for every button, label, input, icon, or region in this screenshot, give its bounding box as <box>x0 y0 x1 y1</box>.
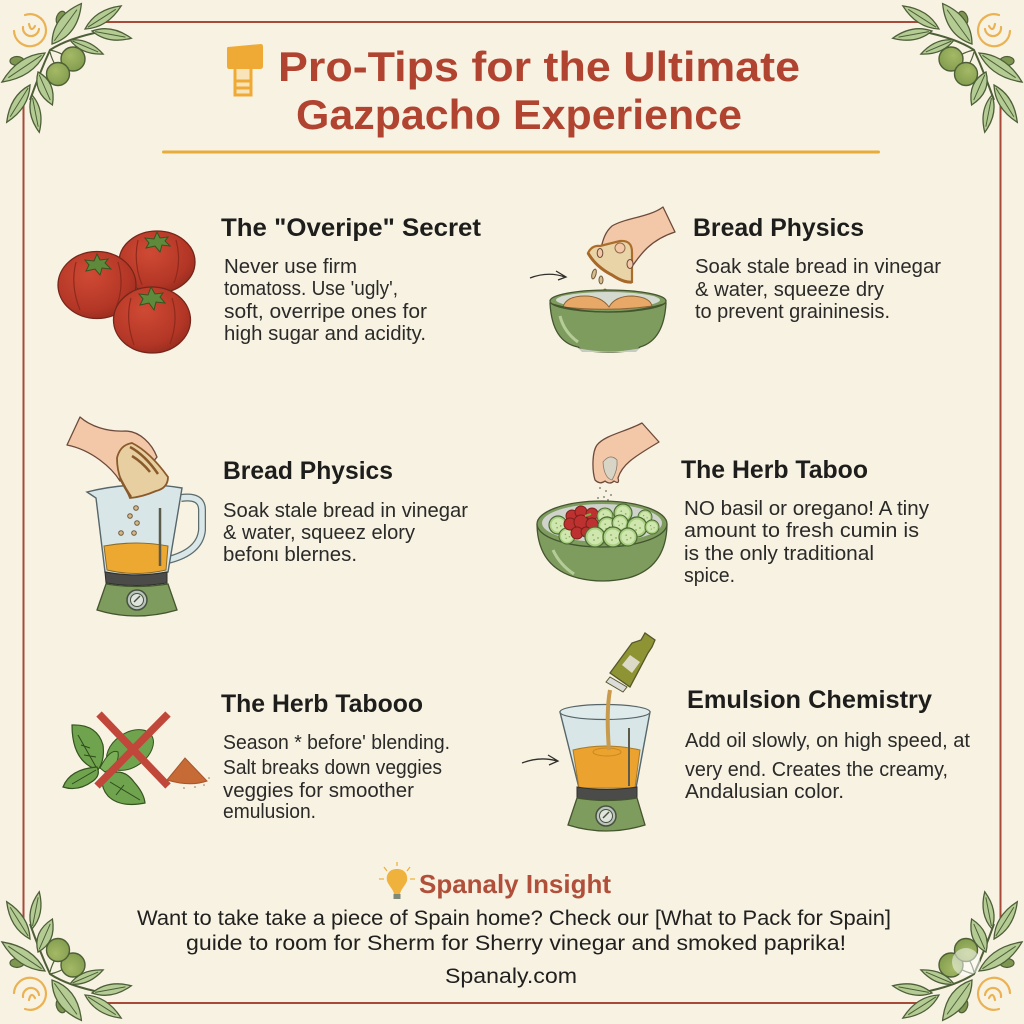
panel: bread physics top <box>530 207 941 352</box>
icon: oil bottle pouring into blender <box>522 633 655 831</box>
title <box>278 43 800 138</box>
body text: very end. Creates the creamy, <box>685 759 948 781</box>
body text: emulusion. <box>223 801 316 823</box>
icon: bread into blender <box>67 417 202 616</box>
body text: Season * before' blending. <box>223 732 450 754</box>
body text: & water, squeez elory <box>223 522 415 544</box>
panel: overripe secret <box>58 214 482 353</box>
icon: tomatoes <box>58 231 195 353</box>
heading: Emulsion Chemistry <box>687 686 932 714</box>
body text: veggies for smoother <box>223 780 414 802</box>
panel: bread physics middle <box>67 417 468 616</box>
body text: is the only traditional <box>684 543 874 565</box>
corner ornament: bottom left <box>0 891 132 1024</box>
body text <box>695 256 941 323</box>
panel: herb taboo left <box>63 690 450 823</box>
body text: to prevent graininesis. <box>695 301 890 323</box>
website: Spanaly.com <box>445 964 577 988</box>
footer text: Want to take take a piece of Spain home? Check our [What to Pack for Spain] <box>137 906 891 930</box>
heading: The "Overipe" Secret <box>221 214 482 242</box>
body text: Soak stale bread in vinegar <box>223 500 468 522</box>
icon: light bulb <box>379 862 415 899</box>
body text: Salt breaks down veggies <box>223 757 442 779</box>
body text: soft, overripe ones for <box>224 301 427 323</box>
body text <box>223 500 468 566</box>
body text <box>223 732 450 823</box>
body text: spice. <box>684 565 735 587</box>
body text <box>685 730 970 803</box>
icon: hand squeezing bread over bowl <box>530 207 675 352</box>
title: Pro-Tips for the Ultimate <box>278 43 800 90</box>
body text: tomatoss. Use 'ugly', <box>224 278 398 300</box>
body text: Never use firm <box>224 256 357 278</box>
heading: The Herb Tabooo <box>221 690 423 718</box>
body text: amount to fresh cumin is <box>684 520 919 542</box>
body text: & water, squeeze dry <box>695 279 884 301</box>
heading: Bread Physics <box>693 214 864 242</box>
body text: Add oil slowly, on high speed, at <box>685 730 970 752</box>
heading: Bread Physics <box>223 457 393 485</box>
corner ornament: top left <box>0 0 132 133</box>
title icon <box>227 44 263 95</box>
body text: befonι blernes. <box>223 544 357 566</box>
body text: NO basil or oregano! A tiny <box>684 498 929 520</box>
footer text: guide to room for Sherm for Sherry vinegar and smoked paprika! <box>186 931 846 955</box>
title underline <box>162 150 880 154</box>
heading: The Herb Taboo <box>681 456 868 484</box>
icon: crossed out herbs and spice <box>63 714 210 804</box>
corner ornament: top right <box>892 0 1024 133</box>
panel: emulsion chemistry <box>522 633 970 831</box>
body text <box>224 256 427 345</box>
panel: herb taboo right <box>537 423 929 587</box>
icon: salad bowl with sprinkling hand <box>537 423 667 581</box>
body text: high sugar and acidity. <box>224 323 426 345</box>
footer heading: Spanaly Insight <box>419 869 611 899</box>
body text: Soak stale bread in vinegar <box>695 256 941 278</box>
footer text <box>137 906 891 955</box>
title: Gazpacho Experience <box>296 91 742 138</box>
corner ornament: bottom right <box>892 891 1024 1024</box>
body text <box>684 498 929 587</box>
body text: Andalusian color. <box>685 781 844 803</box>
